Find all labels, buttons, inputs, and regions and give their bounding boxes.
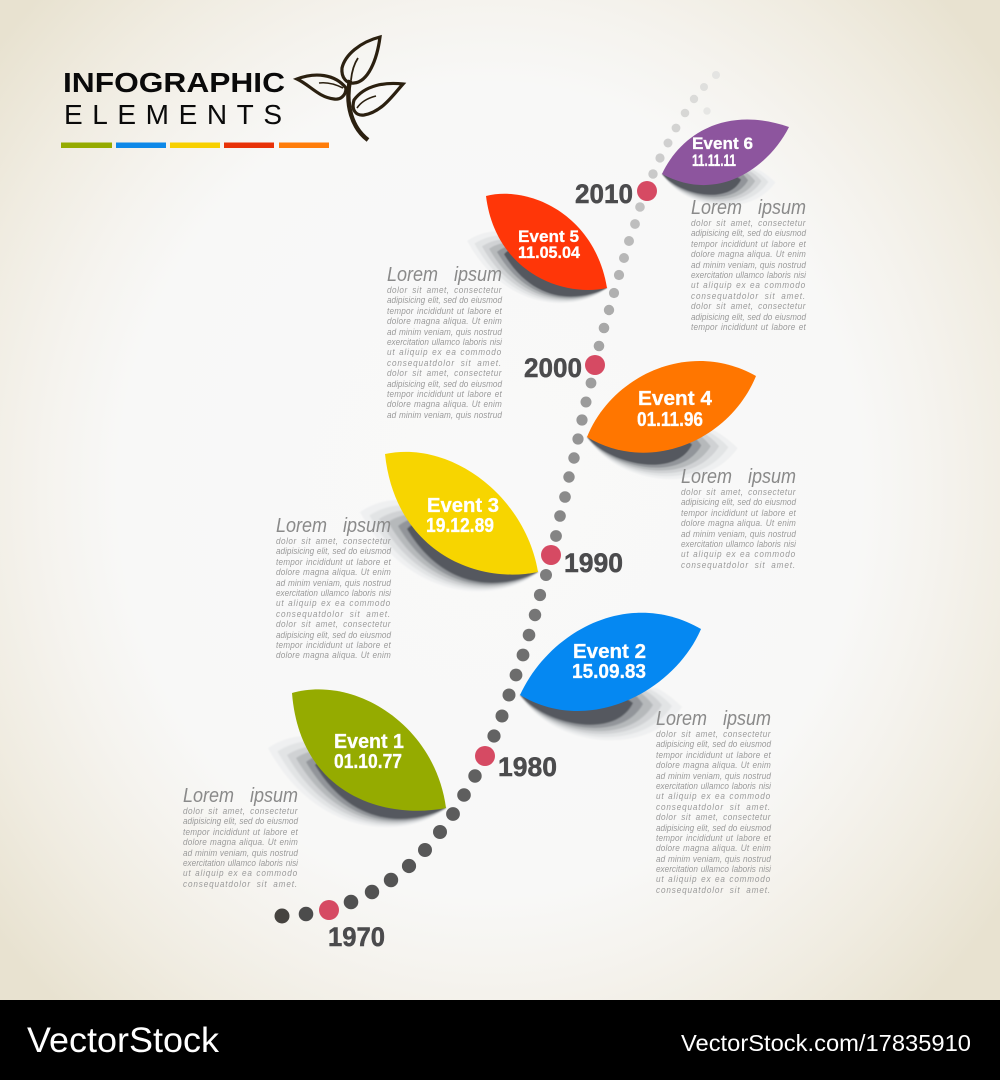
colour bars under title [61,142,329,148]
milestone: 1970: 1970 [328,922,385,952]
text block: event 5: tempor incididunt ut labore et [387,306,502,316]
event 1 green leaf: Event 1 [334,731,404,753]
text block: event 3: adipisicing elit, sed do eiusmod [276,547,391,557]
text block: event 5: Lorem ipsum [387,263,502,286]
text block: event 4: tempor incididunt ut labore et [681,508,796,518]
text block: event 6: ad minim veniam, quis nostrud [691,260,806,270]
text block: event 3: Lorem ipsum [276,514,391,537]
text block: event 5: dolore magna aliqua. Ut enim [387,317,502,327]
milestone: 1970 [319,900,385,952]
text block: event 4: consequatdolor sit amet. [681,560,796,570]
event 4 orange leaf [587,361,756,479]
text block: event 4: ad minim veniam, quis nostrud [681,529,796,539]
text block: event 2: dolor sit amet, consectetur [656,729,771,739]
text block: event 2: consequatdolor sit amet. [656,885,771,895]
event 4 orange leaf: Event 4 [638,388,713,410]
text block: event 3: ut aliquip ex ea commodo [276,599,391,609]
text block: event 1: exercitation ullamco laboris nisi [183,858,298,868]
text block: event 4: exercitation ullamco laboris nisi [681,539,796,549]
title: infographic elements: ELEMENTS [64,99,282,130]
text block: event 5: dolor sit amet, consectetur [387,369,502,379]
text block: event 5: ad minim veniam, quis nostrud [387,410,502,420]
text block: event 5: ad minim veniam, quis nostrud [387,327,502,337]
text block: event 2: dolor sit amet, consectetur [656,813,771,823]
text block: event 6: Lorem ipsum [691,196,806,219]
text block: event 6: adipisicing elit, sed do eiusmod [691,229,806,239]
text block: event 1: dolore magna aliqua. Ut enim [183,838,298,848]
text block: event 2: tempor incididunt ut labore et [656,750,771,760]
text block: event 5: dolore magna aliqua. Ut enim [387,400,502,410]
text block: event 1: ad minim veniam, quis nostrud [183,848,298,858]
text block: event 3: dolore magna aliqua. Ut enim [276,651,391,661]
event 5 red leaf [467,194,607,303]
footer bar: VectorStock.com/17835910 [681,1030,971,1056]
text block: event 5: exercitation ullamco laboris nisi [387,337,502,347]
event 3 yellow leaf: Event 3 [427,495,499,517]
title: infographic elements: INFOGRAPHIC [63,67,285,98]
milestone: 1990 [541,545,623,578]
text block: event 3: exercitation ullamco laboris nisi [276,588,391,598]
text block: event 6 [691,196,806,332]
text block: event 4: adipisicing elit, sed do eiusmod [681,498,796,508]
text block: event 3: dolor sit amet, consectetur [276,620,391,630]
text block: event 5: tempor incididunt ut labore et [387,389,502,399]
event 1 green leaf: 01.10.77 [334,751,402,773]
text block: event 2: exercitation ullamco laboris nisi [656,865,771,874]
text block: event 2: dolore magna aliqua. Ut enim [656,844,771,854]
text block: event 6: exercitation ullamco laboris nisi [691,270,806,280]
milestone: 1980: 1980 [498,752,557,782]
text block: event 1: adipisicing elit, sed do eiusmod [183,817,298,827]
footer bar: VectorStock [27,1021,220,1060]
text block: event 2: adipisicing elit, sed do eiusmod [656,740,771,750]
text block: event 2: ut aliquip ex ea commodo [656,792,771,802]
text block: event 6: consequatdolor sit amet. [691,291,806,301]
event 2 blue leaf [520,613,701,740]
text block: event 2: adipisicing elit, sed do eiusmod [656,823,771,833]
milestone: 1990: 1990 [564,548,623,578]
text block: event 3 [276,514,392,661]
event 5 red leaf: Event 5 [518,227,579,246]
text block: event 5: adipisicing elit, sed do eiusmod [387,296,502,306]
event 1 green leaf [268,689,446,827]
text block: event 4 [681,465,796,570]
text block: event 5 [387,263,502,420]
text block: event 2: tempor incididunt ut labore et [656,833,771,843]
milestone: 2000: 2000 [524,353,582,383]
event 6 purple leaf: 11.11.11 [692,151,736,170]
text block: event 5: adipisicing elit, sed do eiusmod [387,379,502,389]
text block: event 2: dolore magna aliqua. Ut enim [656,761,771,771]
text block: event 3: dolor sit amet, consectetur [276,536,391,546]
text block: event 6: dolor sit amet, consectetur [691,218,806,228]
text block: event 3: adipisicing elit, sed do eiusmod [276,630,391,640]
text block: event 2: ut aliquip ex ea commodo [656,875,771,885]
text block: event 4: Lorem ipsum [681,465,796,488]
icon: three leaf sprig [297,37,403,140]
text block: event 6: dolore magna aliqua. Ut enim [691,250,806,260]
timeline dotted path [274,71,720,924]
text block: event 6: tempor incididunt ut labore et [691,239,806,249]
text block: event 6: tempor incididunt ut labore et [691,322,806,332]
text block: event 2 [656,707,772,895]
text block: event 6: adipisicing elit, sed do eiusmod [691,312,806,322]
text block: event 6: ut aliquip ex ea commodo [691,281,806,291]
milestone: 2010: 2010 [575,179,633,209]
text block: event 1: Lorem ipsum [183,784,298,807]
text block: event 1 [183,784,298,889]
event 3 yellow leaf [360,452,538,591]
event 3 yellow leaf: 19.12.89 [426,515,494,537]
milestone: 1980 [475,746,557,782]
text block: event 5: dolor sit amet, consectetur [387,285,502,295]
text block: event 1: tempor incididunt ut labore et [183,827,298,837]
text block: event 1: ut aliquip ex ea commodo [183,869,298,879]
title: infographic elements [63,67,285,130]
text block: event 2: exercitation ullamco laboris nisi [656,781,771,791]
text block: event 2: ad minim veniam, quis nostrud [656,771,771,781]
event 2 blue leaf: 15.09.83 [572,661,646,683]
text block: event 4: ut aliquip ex ea commodo [681,550,796,560]
text block: event 5: consequatdolor sit amet. [387,358,502,368]
text block: event 3: tempor incididunt ut labore et [276,640,391,650]
footer bar [0,1000,1000,1080]
text block: event 5: ut aliquip ex ea commodo [387,348,502,358]
text block: event 2: consequatdolor sit amet. [656,802,771,812]
text block: event 3: ad minim veniam, quis nostrud [276,578,391,588]
text block: event 2: ad minim veniam, quis nostrud [656,854,771,864]
text block: event 2: Lorem ipsum [656,707,771,730]
event 6 purple leaf: Event 6 [692,134,753,153]
event 5 red leaf: 11.05.04 [518,243,581,262]
text block: event 4: dolor sit amet, consectetur [681,487,796,497]
text block: event 3: consequatdolor sit amet. [276,609,391,619]
text block: event 4: dolore magna aliqua. Ut enim [681,519,796,529]
text block: event 6: dolor sit amet, consectetur [691,302,806,312]
event 6 purple leaf [662,120,789,206]
text block: event 1: consequatdolor sit amet. [183,879,298,889]
text block: event 3: dolore magna aliqua. Ut enim [276,568,391,578]
text block: event 1: dolor sit amet, consectetur [183,806,298,816]
event 4 orange leaf: 01.11.96 [637,409,703,431]
text block: event 3: tempor incididunt ut labore et [276,557,391,567]
event 2 blue leaf: Event 2 [573,641,646,663]
